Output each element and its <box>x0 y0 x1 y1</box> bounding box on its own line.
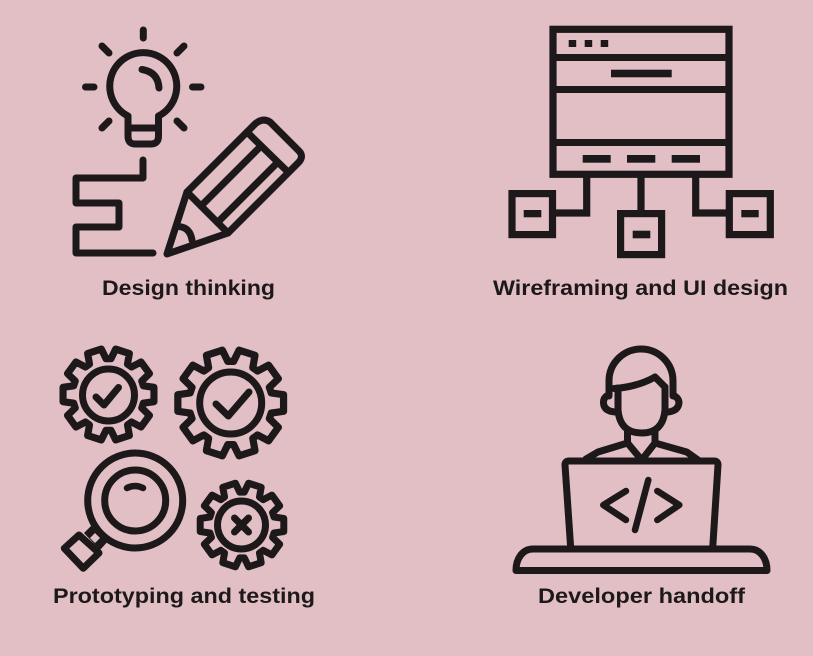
icon: magnifying glass <box>64 453 183 568</box>
icon: center node box <box>621 214 662 255</box>
label: design thinking: Design thinking <box>102 276 275 300</box>
panel: prototyping and testing <box>53 349 315 608</box>
label: developer handoff: Developer handoff <box>538 584 746 608</box>
panel: wireframing and UI design <box>493 29 788 300</box>
connectors <box>555 177 727 213</box>
icon: wireframe window <box>552 29 730 174</box>
icon: pencil <box>167 120 302 254</box>
icon: winding path line <box>76 160 153 253</box>
icon: right node box <box>729 194 770 235</box>
icon: gear with cross <box>200 483 284 567</box>
panel: developer handoff <box>516 349 767 608</box>
icon: light bulb <box>86 30 201 144</box>
icon: code brackets <box>603 480 679 530</box>
icon: large gear with check <box>178 350 284 456</box>
icon: small gear with check <box>63 349 154 440</box>
label: wireframing and UI design: Wireframing and UI design <box>493 276 788 300</box>
label: prototyping and testing: Prototyping and testing <box>53 584 315 608</box>
icon: developer person <box>586 349 698 460</box>
panel: design thinking <box>76 30 302 300</box>
icon: laptop <box>516 461 767 570</box>
icon: left node box <box>512 194 552 235</box>
